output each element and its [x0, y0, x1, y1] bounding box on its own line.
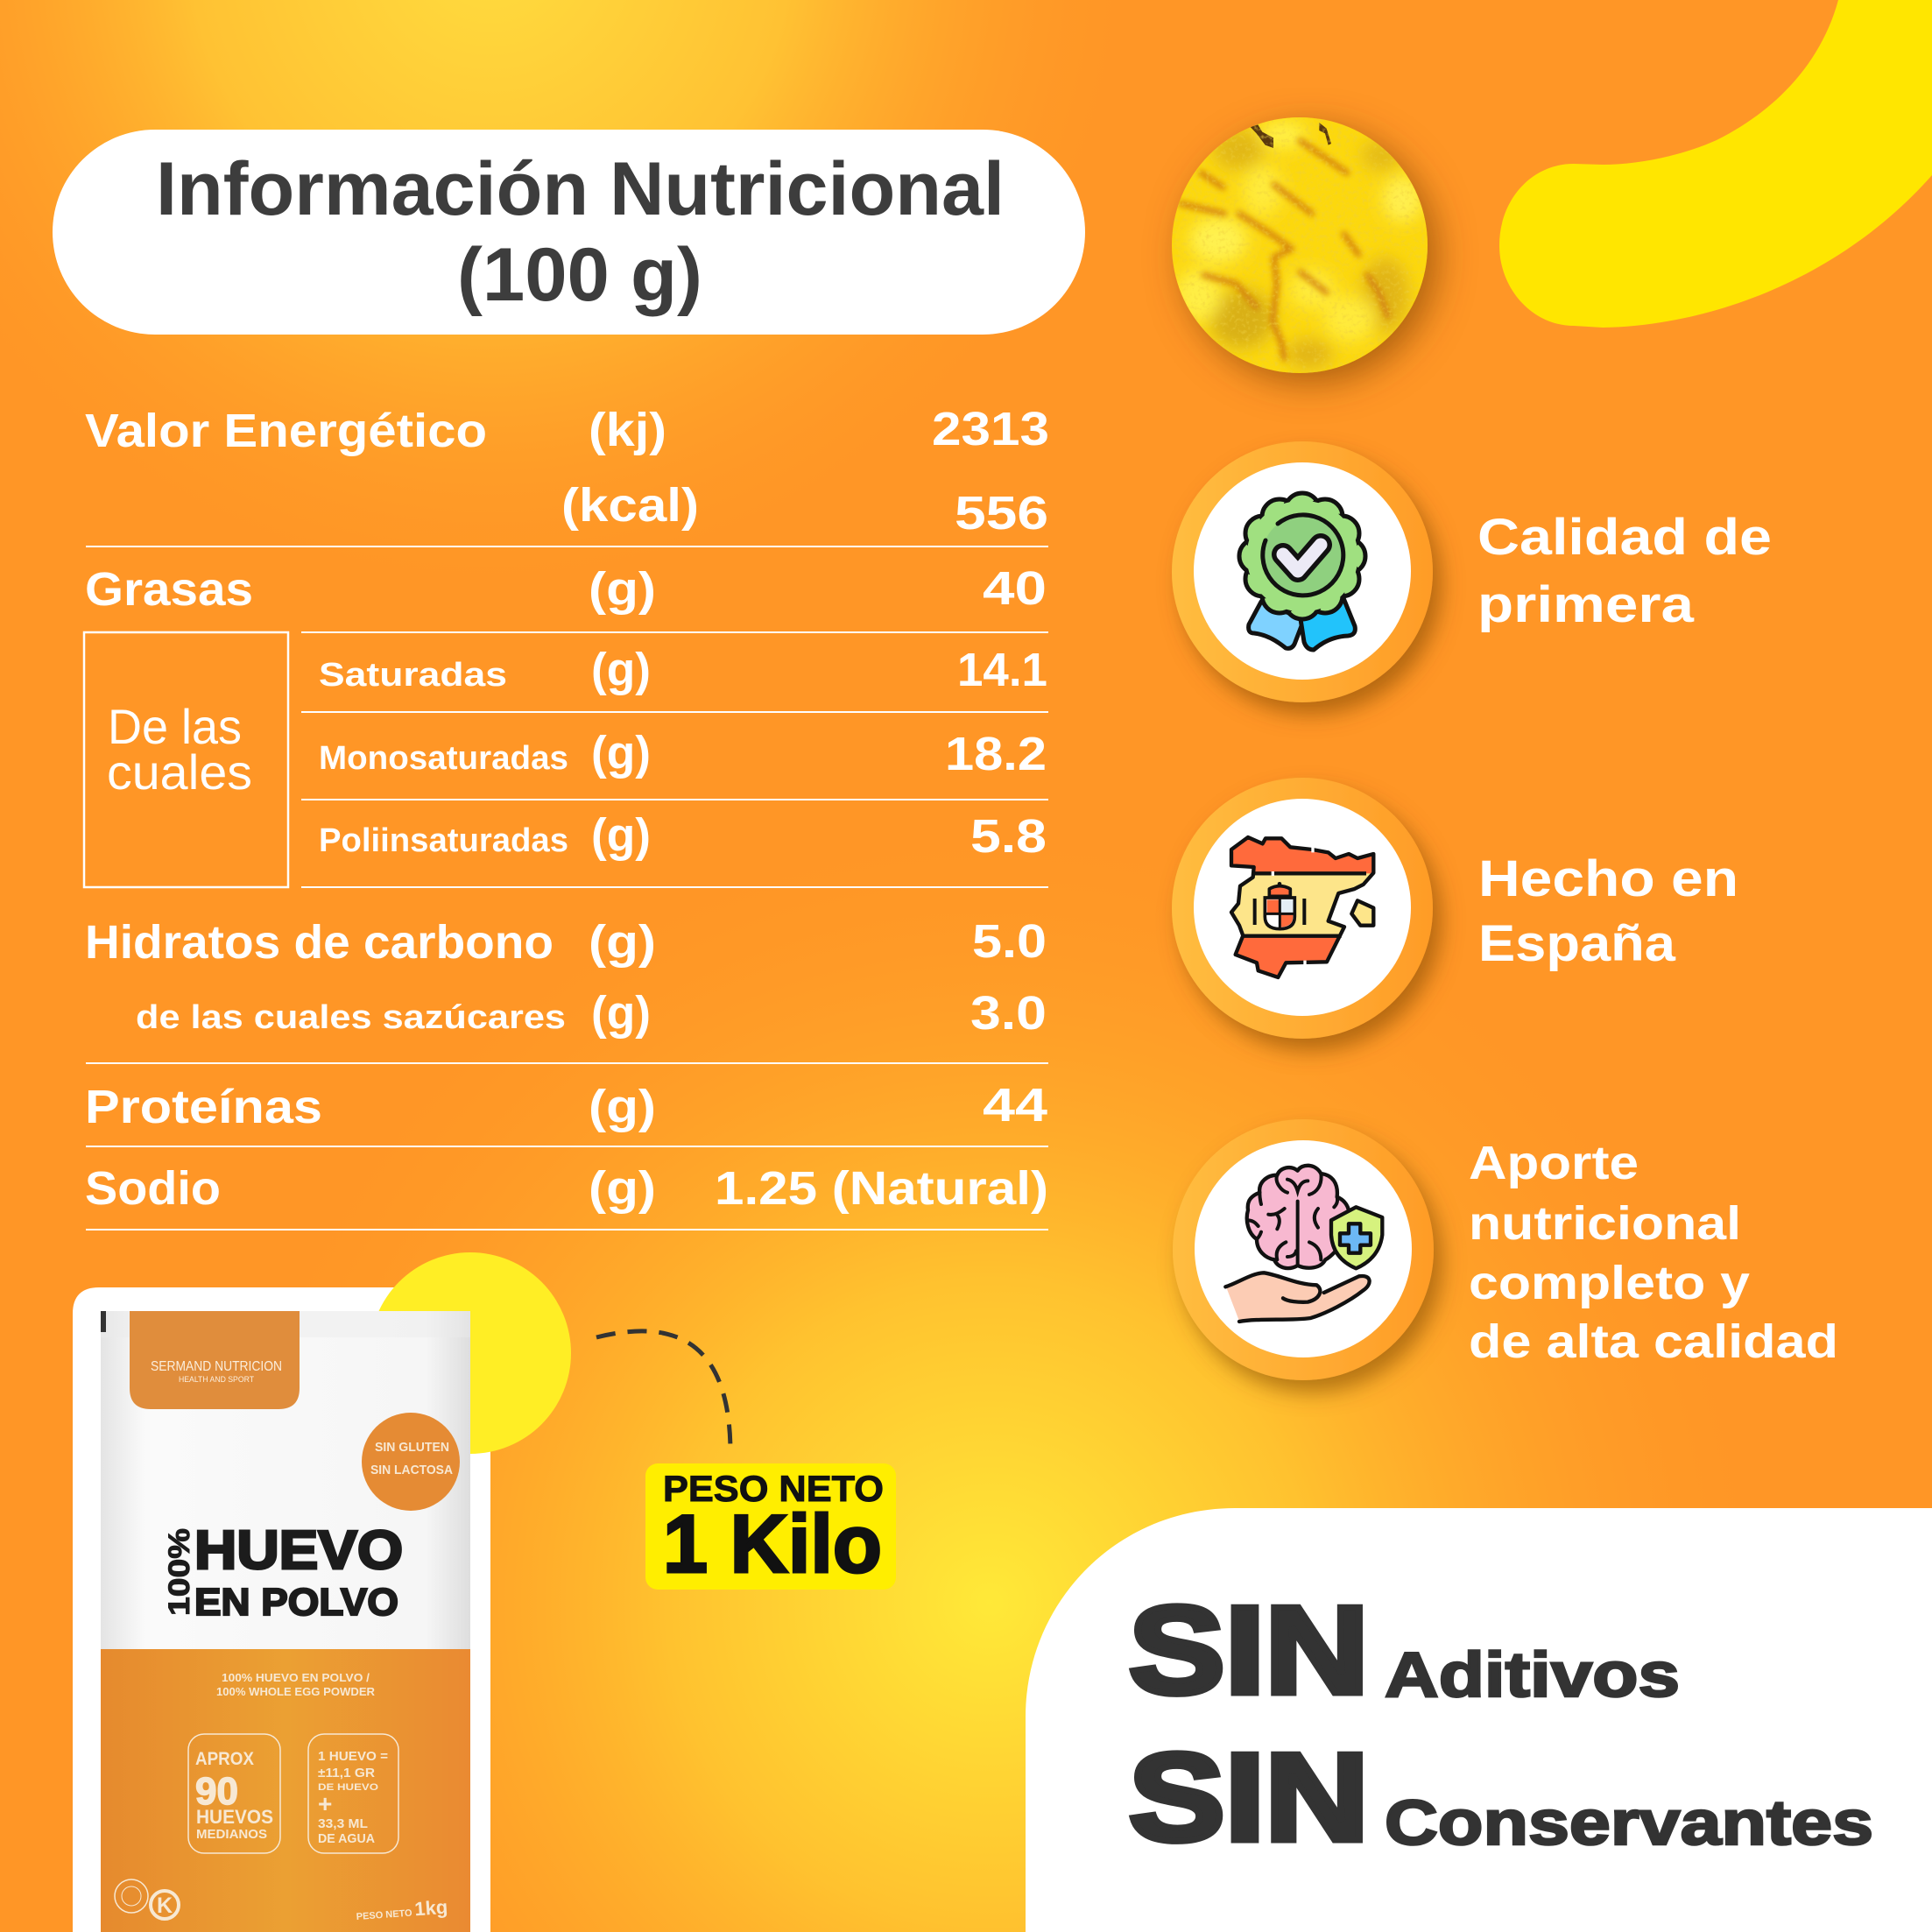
row: proteínas: Proteínas [85, 1081, 322, 1133]
title pill [53, 130, 1085, 335]
badge: aporte nutricional [1173, 1119, 1838, 1380]
product name: 100% [163, 1528, 196, 1616]
text: sin aditivos [1129, 1581, 1680, 1720]
row: azúcares: de las cuales sazúcares [136, 999, 566, 1036]
panel: sin aditivos sin conservantes [1026, 1508, 1932, 1932]
row: hidratos de carbono: 5.0 [972, 915, 1047, 968]
peso neto on bag: PESO NETO 1kg [356, 1896, 448, 1924]
row: saturadas [319, 644, 1047, 696]
row: poliinsaturadas: Poliinsaturadas [319, 822, 568, 859]
row: proteínas: 44 [983, 1079, 1047, 1132]
row: valor energético kj: (kj) [589, 404, 666, 456]
row: monosaturadas: (g) [591, 727, 651, 779]
text: sin conservantes: Conservantes [1385, 1788, 1873, 1858]
heading [156, 147, 1005, 317]
product name [168, 1529, 402, 1617]
yellow circle [370, 1252, 571, 1454]
badge sin gluten [362, 1413, 460, 1511]
ring [1173, 1119, 1434, 1380]
net weight label [645, 1463, 896, 1590]
ring [1172, 441, 1433, 702]
row: valor energético kj: 2313 [932, 403, 1049, 455]
row: kcal [561, 479, 1048, 539]
row: sodio: (g) [589, 1162, 656, 1215]
text: sin conservantes: SIN [1129, 1728, 1369, 1867]
heading: Información Nutricional [156, 147, 1005, 231]
row: azúcares: 3.0 [970, 987, 1047, 1040]
row: poliinsaturadas: 5.8 [970, 810, 1047, 863]
badge: españa [1172, 778, 1738, 1039]
row: hidratos de carbono [85, 915, 1047, 969]
certification icons: K [157, 1893, 173, 1918]
ring [1172, 778, 1433, 1039]
text: aporte nutricional [1469, 1137, 1838, 1368]
badge sin gluten: SIN GLUTEN [375, 1440, 449, 1455]
text: sin aditivos: Aditivos [1385, 1640, 1680, 1710]
row: monosaturadas: 18.2 [945, 728, 1047, 780]
box aprox 90 huevos: MEDIANOS [196, 1827, 267, 1842]
product bag [101, 1311, 470, 1932]
box equivalencia [308, 1734, 398, 1853]
row: sodio: 1.25 (Natural) [715, 1162, 1048, 1215]
box: de las cuales: De las [108, 699, 242, 754]
product name: HUEVO [194, 1520, 403, 1581]
text: aporte nutricional: de alta calidad [1469, 1315, 1838, 1368]
row: grasas: (g) [589, 563, 656, 616]
box aprox 90 huevos: APROX [195, 1749, 254, 1769]
text: calidad de primera: Calidad de [1477, 509, 1772, 566]
row: grasas: 40 [983, 562, 1047, 615]
certification icons [115, 1879, 179, 1919]
box aprox 90 huevos [188, 1734, 280, 1853]
icon: brain and hand [1225, 1166, 1382, 1322]
row: azúcares [136, 987, 1047, 1040]
box equivalencia: ±11,1 GR [318, 1766, 375, 1780]
box: de las cuales [84, 632, 288, 887]
net weight label: 1 Kilo [663, 1498, 882, 1590]
text: sin conservantes [1129, 1728, 1873, 1867]
text: calidad de primera [1477, 509, 1772, 633]
row: poliinsaturadas [319, 809, 1047, 863]
text: hecho en españa [1478, 850, 1738, 972]
text: hecho en españa: Hecho en [1478, 850, 1738, 907]
row: saturadas: Saturadas [319, 657, 507, 694]
row: sodio: Sodio [85, 1162, 221, 1215]
decorative yellow blob top right [1499, 0, 1932, 328]
row: hidratos de carbono: (g) [589, 916, 656, 969]
row: monosaturadas: Monosaturadas [319, 740, 568, 777]
text: sin aditivos: SIN [1129, 1581, 1369, 1720]
row: proteínas: (g) [589, 1081, 656, 1133]
brand tab [130, 1311, 300, 1409]
powder photo circle [1172, 117, 1428, 373]
box equivalencia: DE HUEVO [318, 1782, 379, 1793]
bag subtitle [217, 1673, 375, 1696]
text: hecho en españa: España [1478, 915, 1676, 972]
brand tab: HEALTH AND SPORT [179, 1375, 254, 1384]
brand tab: SERMAND NUTRICION [151, 1359, 282, 1374]
box: de las cuales: cuales [107, 744, 252, 800]
dashed arrow [596, 1331, 730, 1456]
product name: EN POLVO [194, 1581, 398, 1624]
row: valor energético kj: Valor Energético [85, 405, 487, 457]
badge sin gluten: SIN LACTOSA [370, 1463, 453, 1477]
bag subtitle: 100% WHOLE EGG POWDER [216, 1685, 376, 1698]
icon: map of spain [1226, 832, 1378, 984]
row: kcal: 556 [955, 487, 1048, 539]
text: calidad de primera: primera [1477, 576, 1695, 633]
row: azúcares: (g) [591, 987, 651, 1040]
row: grasas [85, 562, 1047, 616]
text: aporte nutricional: Aporte [1469, 1137, 1639, 1189]
net weight label: PESO NETO [663, 1468, 884, 1509]
row: grasas: Grasas [85, 563, 253, 616]
row: valor energético kj [85, 403, 1049, 457]
product card [73, 1252, 571, 1932]
text: aporte nutricional: completo y [1469, 1257, 1750, 1309]
box equivalencia: + [318, 1790, 332, 1817]
row: sodio [85, 1162, 1048, 1215]
badge: calidad [1172, 441, 1772, 702]
nutrition table [84, 403, 1049, 1230]
row: poliinsaturadas: (g) [591, 809, 651, 862]
row: kcal: (kcal) [561, 479, 699, 532]
box aprox 90 huevos: HUEVOS [196, 1806, 273, 1828]
box equivalencia: DE AGUA [318, 1831, 375, 1846]
row: proteínas [85, 1079, 1047, 1133]
text: aporte nutricional: nutricional [1469, 1197, 1741, 1250]
box equivalencia: 1 HUEVO = [318, 1749, 388, 1764]
box equivalencia: 33,3 ML [318, 1816, 368, 1831]
box aprox 90 huevos: 90 [195, 1770, 238, 1813]
row: monosaturadas [319, 727, 1047, 780]
row: saturadas: (g) [591, 644, 651, 696]
row: saturadas: 14.1 [957, 644, 1047, 696]
row: hidratos de carbono: Hidratos de carbono [85, 916, 554, 969]
bag subtitle: 100% HUEVO EN POLVO / [222, 1671, 370, 1684]
heading: (100 g) [457, 233, 702, 317]
icon: medal [1239, 493, 1365, 650]
